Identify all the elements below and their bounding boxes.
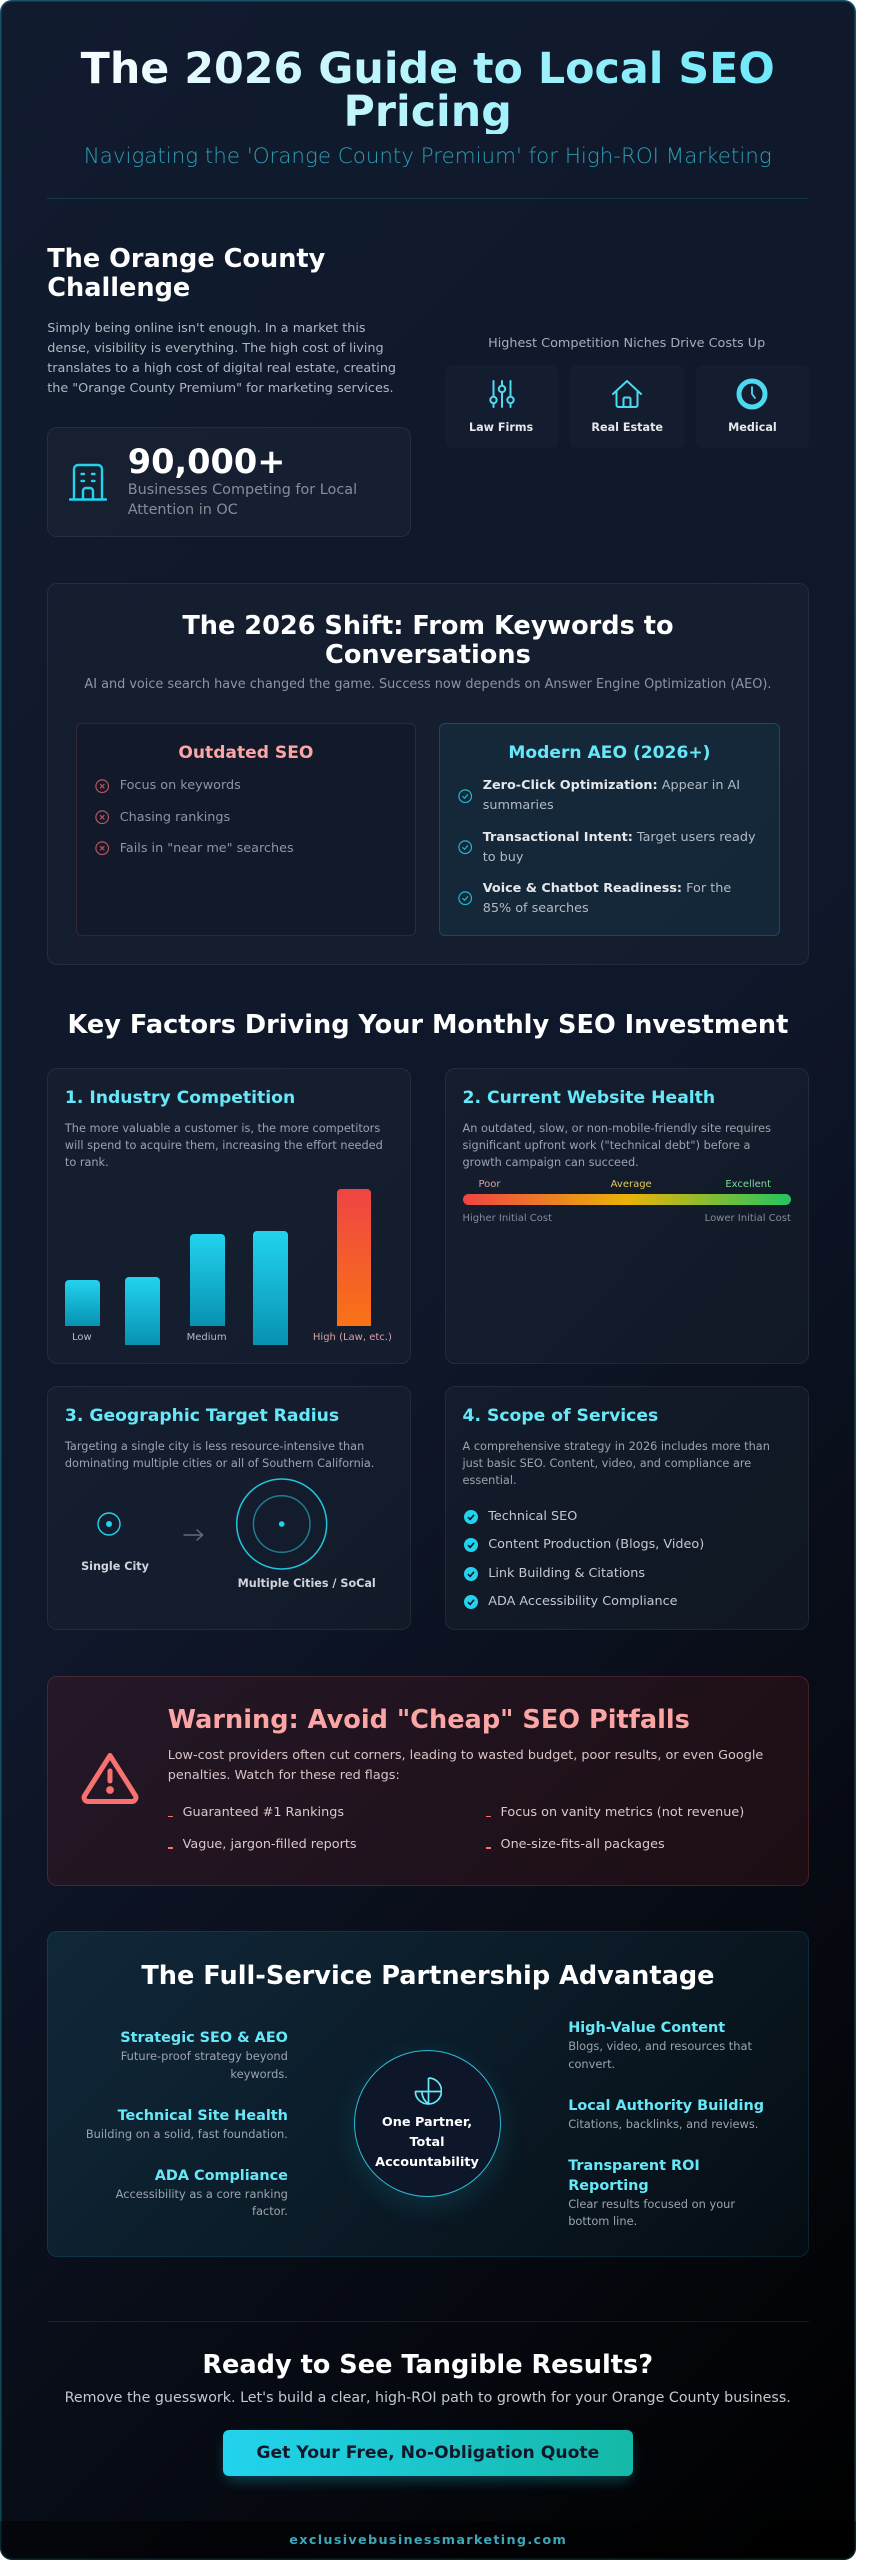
heading: 3. Geographic Target Radius xyxy=(65,1406,339,1426)
label: medium: Medium xyxy=(187,1332,227,1343)
heading: 1. Industry Competition xyxy=(65,1088,295,1108)
label: low: Low xyxy=(72,1332,92,1343)
section: Orange County challenge text xyxy=(47,244,396,396)
item xyxy=(458,778,740,813)
heading: Ready to See Tangible Results? xyxy=(202,2350,653,2380)
item: technical health: Building on a solid, fast foundation. xyxy=(86,2127,288,2141)
niche: medical xyxy=(696,365,809,448)
item xyxy=(458,880,731,916)
button xyxy=(223,2430,632,2476)
stat card: 90,000+ xyxy=(47,427,411,537)
item: high-value content: convert. xyxy=(568,2057,615,2071)
section: competition niches xyxy=(469,336,777,434)
red flag: Vague, jargon-filled reports xyxy=(183,1837,357,1852)
body text xyxy=(462,1440,770,1487)
label: Real Estate xyxy=(591,421,663,434)
item: ADA: ADA Compliance xyxy=(155,2168,288,2184)
body text: A comprehensive strategy in 2026 includes more than xyxy=(462,1440,770,1453)
heading xyxy=(47,244,325,303)
label: Law Firms xyxy=(469,421,533,434)
item: ADA: Accessibility as a core ranking xyxy=(116,2187,288,2201)
stat label: Businesses Competing for Local xyxy=(128,482,357,498)
paragraph: Simply being online isn't enough. In a market this xyxy=(47,320,366,336)
red flag: Guaranteed #1 Rankings xyxy=(183,1805,344,1820)
item: transparent reporting: bottom line. xyxy=(568,2214,637,2228)
subtitle: Navigating the 'Orange County Premium' for High-ROI Marketing xyxy=(84,144,772,169)
item: transparent reporting: Transparent ROI xyxy=(568,2158,700,2174)
body text xyxy=(64,1122,383,1169)
item: strategic SEO: Strategic SEO & AEO xyxy=(120,2030,288,2046)
health meter xyxy=(462,1178,791,1224)
item: transparent reporting: Clear results focused on your xyxy=(568,2197,735,2211)
header xyxy=(47,44,808,199)
item: ADA xyxy=(116,2168,288,2218)
caption: higher cost: Higher Initial Cost xyxy=(462,1213,552,1224)
circle text: Accountability xyxy=(375,2154,479,2170)
item: Focus on keywords xyxy=(120,778,241,793)
heading: Outdated SEO xyxy=(178,743,313,763)
paragraph: Remove the guesswork. Let's build a clear, high-ROI path to growth for your Orange County business. xyxy=(65,2390,791,2406)
item: local authority: Local Authority Building xyxy=(568,2098,764,2114)
title: Pricing xyxy=(344,86,512,136)
arrow xyxy=(184,1530,202,1540)
caption: lower cost: Lower Initial Cost xyxy=(705,1213,791,1224)
body text: will spend to acquire them, increasing the effort needed xyxy=(65,1139,383,1152)
item: transparent reporting: Reporting xyxy=(568,2178,649,2194)
item: Voice & Chatbot Readiness: For the xyxy=(483,880,731,896)
icon: clock xyxy=(736,378,768,410)
heading: The 2026 Shift: From Keywords to xyxy=(182,610,674,640)
heading: 4. Scope of Services xyxy=(462,1406,658,1426)
item: to buy xyxy=(483,850,523,864)
item: ADA Accessibility Compliance xyxy=(488,1594,678,1609)
red flag: One-size-fits-all packages xyxy=(500,1837,665,1852)
heading xyxy=(182,610,674,670)
call to action xyxy=(0,2345,856,2480)
panel: 2026 shift xyxy=(47,583,809,965)
stat label xyxy=(128,482,357,518)
panel: modern AEO xyxy=(439,723,780,936)
label: poor: Poor xyxy=(478,1178,501,1190)
body text xyxy=(64,1440,374,1470)
title xyxy=(47,48,808,134)
niche: real estate xyxy=(570,365,684,448)
panel: warning xyxy=(47,1676,809,1886)
item: local authority xyxy=(568,2096,788,2134)
caption: Highest Competition Niches Drive Costs Up xyxy=(488,336,765,351)
body text: to rank. xyxy=(65,1156,109,1169)
paragraph: the "Orange County Premium" for marketing services. xyxy=(47,381,394,396)
panel: website health xyxy=(445,1068,809,1364)
item: strategic SEO: Future-proof strategy beyond xyxy=(121,2049,288,2063)
body text: essential. xyxy=(462,1474,517,1487)
item: high-value content: Blogs, video, and resources that xyxy=(568,2039,752,2053)
item xyxy=(458,830,756,864)
gradient bar xyxy=(462,1194,791,1205)
body text xyxy=(168,1748,763,1783)
bar chart xyxy=(65,1189,392,1345)
item: Chasing rankings xyxy=(120,810,230,825)
stat number: 90,000+ xyxy=(128,442,285,481)
footer xyxy=(0,2521,857,2560)
item: summaries xyxy=(483,798,554,813)
item: ADA: factor. xyxy=(252,2204,288,2218)
body text: Low-cost providers often cut corners, leading to wasted budget, poor results, or even Google xyxy=(168,1748,763,1763)
icon: pie and leaf xyxy=(414,2077,442,2105)
circle text: One Partner, xyxy=(382,2114,472,2130)
label: average: Average xyxy=(611,1178,652,1190)
label: high: High (Law, etc.) xyxy=(313,1332,392,1343)
label: multiple cities: Multiple Cities / SoCal xyxy=(238,1577,376,1590)
paragraph: translates to a high cost of digital real estate, creating xyxy=(47,361,396,376)
item: local authority: Citations, backlinks, and reviews. xyxy=(568,2117,758,2131)
body text: penalties. Watch for these red flags: xyxy=(168,1768,400,1783)
item: technical health: Technical Site Health xyxy=(118,2108,288,2124)
niche: law firms xyxy=(445,365,558,448)
circle text xyxy=(375,2114,479,2170)
icon: home xyxy=(612,380,642,408)
button: Get Your Free, No-Obligation Quote xyxy=(256,2443,599,2463)
body text xyxy=(462,1122,771,1169)
panel: geographic radius xyxy=(47,1386,411,1630)
heading: 2. Current Website Health xyxy=(462,1088,715,1108)
item: Content Production (Blogs, Video) xyxy=(488,1537,704,1552)
heading: The Full-Service Partnership Advantage xyxy=(141,1961,715,1991)
circle text: Total xyxy=(410,2134,444,2150)
heading: Challenge xyxy=(47,273,190,303)
body text: growth campaign can succeed. xyxy=(462,1156,639,1169)
item: strategic SEO: keywords. xyxy=(230,2067,288,2081)
paragraph: dense, visibility is everything. The high cost of living xyxy=(47,341,384,356)
label: excellent: Excellent xyxy=(725,1178,771,1190)
footer: exclusivebusinessmarketing.com xyxy=(289,2533,567,2548)
panel: full-service partnership xyxy=(47,1931,809,2257)
item: technical health xyxy=(86,2108,288,2141)
item: high-value content: High-Value Content xyxy=(568,2020,725,2036)
label: single city: Single City xyxy=(81,1560,150,1573)
radius diagram xyxy=(81,1478,376,1590)
icon: building xyxy=(69,464,107,501)
item: Technical SEO xyxy=(488,1509,577,1524)
item: high-value content xyxy=(568,2018,788,2074)
item: transparent reporting xyxy=(568,2156,788,2232)
service list xyxy=(464,1509,704,1609)
label: Medical xyxy=(728,421,777,434)
body text: The more valuable a customer is, the more competitors xyxy=(65,1122,380,1135)
body text: An outdated, slow, or non-mobile-friendly site requires xyxy=(462,1122,771,1135)
icon: sliders xyxy=(489,380,515,408)
body text: Targeting a single city is less resource-intensive than xyxy=(65,1440,364,1453)
paragraph xyxy=(47,320,396,396)
heading: key factors: Key Factors Driving Your Monthly SEO Investment xyxy=(68,1010,788,1040)
red flag: Focus on vanity metrics (not revenue) xyxy=(500,1805,744,1820)
panel: industry competition xyxy=(47,1068,411,1364)
heading: Conversations xyxy=(325,640,531,670)
item: Zero-Click Optimization: Appear in AI xyxy=(483,778,740,793)
icon: warning triangle xyxy=(82,1753,138,1804)
heading: Modern AEO (2026+) xyxy=(508,743,710,763)
heading: Warning: Avoid "Cheap" SEO Pitfalls xyxy=(168,1705,690,1735)
title: The 2026 Guide to Local SEO xyxy=(81,44,775,94)
item: Transactional Intent: Target users ready xyxy=(483,830,756,844)
item: 85% of searches xyxy=(483,900,589,916)
center circle xyxy=(354,2050,501,2197)
panel: scope of services xyxy=(445,1386,809,1630)
item: Fails in "near me" searches xyxy=(120,841,294,856)
body text: dominating multiple cities or all of Southern California. xyxy=(65,1457,374,1470)
item: Link Building & Citations xyxy=(488,1566,645,1581)
body text: significant upfront work ("technical debt") before a xyxy=(462,1139,750,1152)
item: strategic SEO xyxy=(120,2030,288,2081)
heading: The Orange County xyxy=(47,244,325,274)
panel: outdated SEO xyxy=(76,723,416,936)
body text: just basic SEO. Content, video, and compliance are xyxy=(462,1457,751,1470)
icon: multiple cities xyxy=(237,1479,327,1569)
icon: single city xyxy=(98,1513,120,1535)
subheading: AI and voice search have changed the game. Success now depends on Answer Engine Optimization (AEO). xyxy=(84,677,771,692)
stat label: Attention in OC xyxy=(128,502,238,518)
